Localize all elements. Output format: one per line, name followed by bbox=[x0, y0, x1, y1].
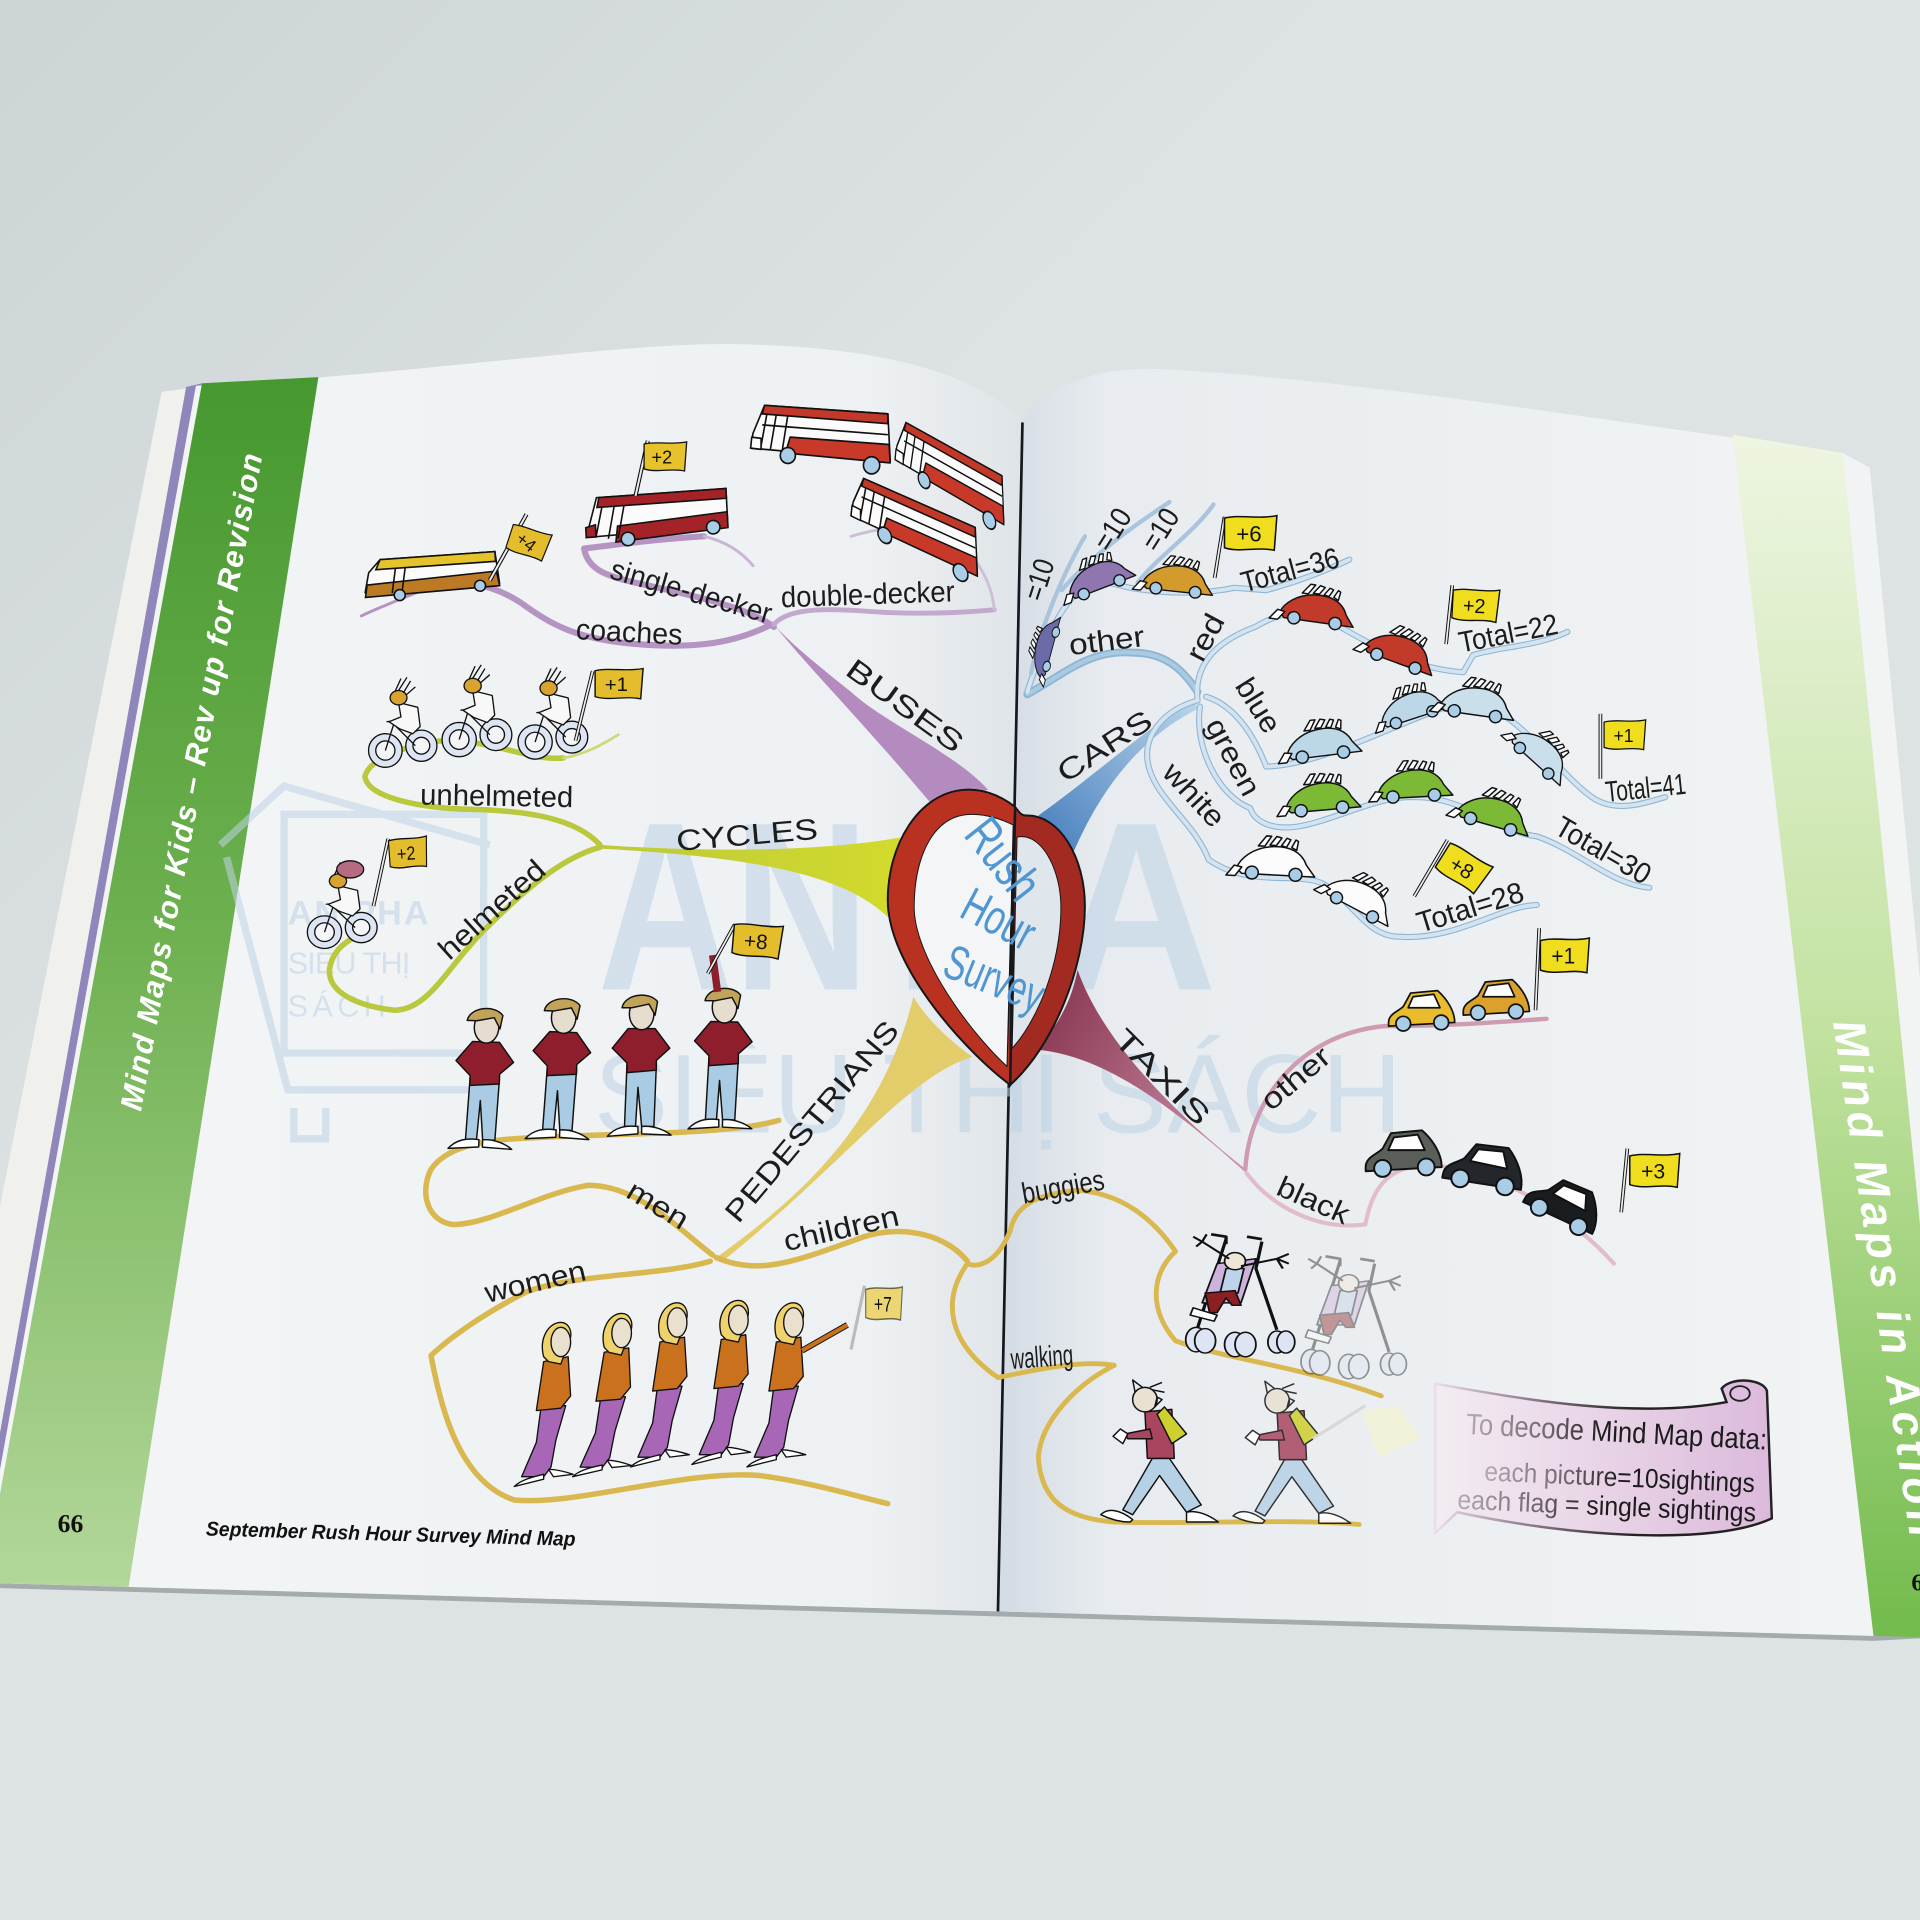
icon: single-decker bus with flag +2: +2 bbox=[652, 447, 672, 467]
central image: heart bbox=[888, 790, 1085, 1085]
label: total 30: Total=30 bbox=[1549, 810, 1657, 891]
buses sub-branches bbox=[361, 527, 994, 646]
right page bbox=[998, 369, 1920, 1636]
watermark logo: SÁCH bbox=[288, 988, 386, 1023]
cars sub-branches bbox=[1027, 560, 1665, 937]
heart centre left white bbox=[915, 815, 1013, 1065]
label: pedestrians: PEDESTRIANS bbox=[718, 1015, 906, 1229]
label: buses: BUSES bbox=[840, 652, 970, 760]
open book bbox=[0, 344, 1920, 1641]
label: other taxis: other bbox=[1254, 1040, 1338, 1117]
icon: single-decker bus with flag +2 bbox=[584, 441, 729, 548]
icon: black taxis with flag +3 bbox=[1366, 1130, 1680, 1243]
watermark logo: AN PHA bbox=[288, 894, 429, 932]
watermark tagline: SIÊU THỊ SÁCH bbox=[594, 1031, 1402, 1157]
back page edge bbox=[0, 387, 196, 1580]
branch: cycles bbox=[329, 735, 900, 1010]
icon: other cars with flag +6 bbox=[1021, 516, 1277, 687]
label: =10 first: =10 bbox=[1017, 555, 1062, 605]
right green strip bbox=[1733, 435, 1920, 1637]
book shadow bbox=[0, 1583, 1920, 1641]
label: buggies: buggies bbox=[1019, 1164, 1107, 1211]
scroll curl bbox=[1730, 1386, 1750, 1401]
watermark logo bbox=[220, 786, 490, 1139]
icon: yellow and orange taxis with flag +1 bbox=[1389, 928, 1589, 1031]
label: women: women bbox=[480, 1254, 589, 1310]
centre title: hour: Hour bbox=[952, 878, 1045, 961]
scroll shape bbox=[1435, 1381, 1772, 1535]
label: taxis: TAXIS bbox=[1107, 1022, 1217, 1132]
label: =10 third: =10 bbox=[1135, 502, 1186, 557]
icon: five women with flag +7 bbox=[514, 1286, 902, 1487]
icon: coach with flag +4 bbox=[363, 514, 552, 603]
icon: yellow and orange taxis with flag +1: +1 bbox=[1551, 944, 1575, 969]
label: total 28: Total=28 bbox=[1413, 876, 1528, 940]
branch: pedestrians bbox=[426, 997, 1381, 1524]
label: total 22: Total=22 bbox=[1456, 608, 1561, 660]
label: children: children bbox=[780, 1200, 902, 1258]
scroll line 2: each flag = single sightings bbox=[1457, 1485, 1757, 1528]
cycles main branch bbox=[600, 838, 900, 917]
icon: four men with flag +8 bbox=[448, 922, 783, 1151]
label: green: green bbox=[1199, 713, 1267, 802]
icon: green cars bbox=[1274, 758, 1538, 841]
taxis sub-branches bbox=[1245, 1019, 1614, 1264]
branch: taxis bbox=[1032, 970, 1614, 1264]
pedestrians main branch bbox=[716, 997, 972, 1261]
icon: three cyclists with flag +1: +1 bbox=[605, 675, 628, 696]
label: red: red bbox=[1179, 608, 1232, 667]
branch: cars bbox=[1017, 502, 1688, 940]
watermark brand name: AN bbox=[598, 772, 869, 1040]
page number 66: 66 bbox=[57, 1509, 84, 1538]
watermark brand name end: HA bbox=[894, 772, 1217, 1040]
label: unhelmeted: unhelmeted bbox=[420, 778, 573, 814]
icon: blue cars with flag +1 bbox=[1274, 672, 1646, 789]
icon: three double-decker buses bbox=[751, 405, 1004, 587]
label: double-decker: double-decker bbox=[780, 575, 955, 614]
centre title: rush: Rush bbox=[954, 806, 1054, 911]
label: walking: walking bbox=[1009, 1339, 1074, 1376]
icon: red cars with flag +2 bbox=[1269, 579, 1500, 680]
left side title: Mind Maps for Kids – Rev up for Revision bbox=[114, 451, 269, 1113]
icon: other cars with flag +6: +6 bbox=[1236, 521, 1262, 546]
icon: coach with flag +4: +4 bbox=[513, 528, 540, 556]
scroll line 1: each picture=10sightings bbox=[1484, 1456, 1755, 1498]
label: cycles: CYCLES bbox=[675, 813, 819, 858]
branch: buses bbox=[361, 527, 994, 804]
label: white: white bbox=[1155, 755, 1232, 834]
heart right half bbox=[1010, 807, 1085, 1085]
icon: white cars with flag +8: +8 bbox=[1445, 852, 1478, 884]
icon: black taxis with flag +3: +3 bbox=[1641, 1160, 1665, 1183]
label: black: black bbox=[1272, 1170, 1355, 1231]
left page bbox=[0, 344, 1022, 1611]
icon: three cyclists with flag +1 bbox=[369, 665, 643, 767]
watermark bbox=[220, 772, 1402, 1157]
centre title: survey: Survey bbox=[936, 935, 1052, 1024]
label: cars: CARS bbox=[1051, 704, 1158, 790]
label: men: men bbox=[621, 1174, 695, 1236]
icon: helmeted cyclist with flag +2: +2 bbox=[396, 842, 416, 865]
icon: four men with flag +8: +8 bbox=[743, 929, 769, 954]
coloured page edges bbox=[0, 383, 202, 1561]
icon: walkers with faded flag bbox=[1101, 1380, 1420, 1523]
icon: buggies bbox=[1186, 1234, 1406, 1379]
heart left half bbox=[888, 790, 1015, 1085]
callout: decode scroll bbox=[1435, 1381, 1772, 1535]
icon: blue cars with flag +1: +1 bbox=[1613, 725, 1634, 746]
cars main branch bbox=[1038, 700, 1200, 857]
label: single-decker: single-decker bbox=[607, 553, 776, 631]
label: blue: blue bbox=[1228, 672, 1287, 739]
icon: red cars with flag +2: +2 bbox=[1462, 595, 1486, 618]
buses main branch bbox=[774, 624, 988, 804]
heart fold line bbox=[1010, 808, 1015, 1085]
label: helmeted: helmeted bbox=[432, 853, 552, 966]
icon: five women with flag +7: +7 bbox=[874, 1292, 892, 1316]
footer caption: September Rush Hour Survey Mind Map bbox=[206, 1519, 576, 1551]
label: total 41: Total=41 bbox=[1604, 768, 1688, 809]
watermark logo: SIÊU THỊ bbox=[288, 945, 410, 980]
icon: white cars with flag +8 bbox=[1226, 834, 1493, 931]
faint =10 twigs bbox=[1031, 502, 1213, 673]
scroll heading: To decode Mind Map data: bbox=[1465, 1408, 1768, 1457]
heart centre right white bbox=[1013, 837, 1060, 1047]
label: total 36: Total=36 bbox=[1237, 542, 1343, 599]
left green strip bbox=[0, 377, 318, 1587]
spine bbox=[998, 422, 1022, 1611]
icon: helmeted cyclist with flag +2 bbox=[307, 836, 428, 948]
label: other cars: other bbox=[1067, 620, 1147, 662]
cycles sub-branches bbox=[329, 735, 618, 1010]
label: coaches: coaches bbox=[575, 613, 683, 652]
label: =10 second: =10 bbox=[1087, 502, 1139, 557]
taxis main branch bbox=[1032, 970, 1251, 1178]
pedestrians sub-branches bbox=[426, 1120, 1381, 1524]
